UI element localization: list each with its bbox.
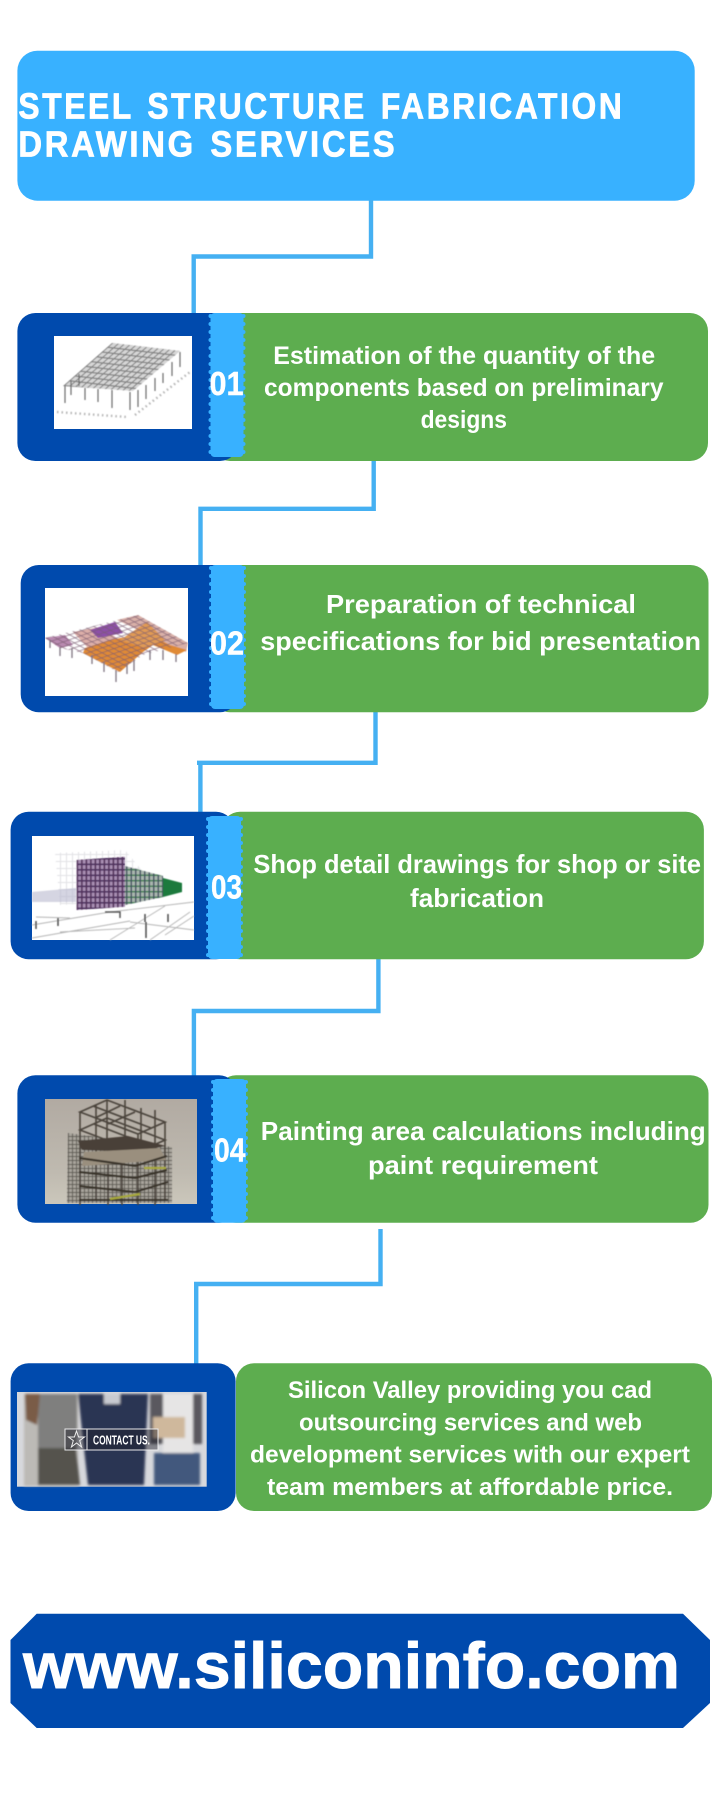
connector arrow: step 3 to step 4 [192,959,378,1076]
step 1 text [264,342,664,434]
connector arrow: step 4 to contact card [194,1229,380,1364]
image: steel building photo [45,1099,197,1205]
step 2 text: Preparation of technical [326,589,636,619]
connector arrow: step 1 to step 2 [198,457,374,565]
title text: DRAWING SERVICES [18,124,397,165]
step 4 text: paint requirement [368,1150,598,1180]
step 3 number strip [208,816,242,959]
contact card text: team members at affordable price. [267,1474,673,1501]
image: multi-storey wireframe [32,836,194,940]
step 4 text: Painting area calculations including [261,1116,706,1146]
step 1 number strip: 01 [210,365,244,402]
step 1 number strip [210,313,244,457]
contact card text: Silicon Valley providing you cad [288,1377,652,1404]
step 3 text: Shop detail drawings for shop or site [253,849,701,879]
title banner [17,51,695,201]
website address: www.siliconinfo.com [22,1629,680,1702]
step 3 text [253,849,701,913]
connector arrow: title to step 1 [192,200,371,313]
contact us sign: CONTACT US. [93,1432,150,1448]
step 1 text: designs [421,406,507,434]
image: team with contact us sign [17,1392,207,1487]
panel: step 3 [11,812,704,959]
panel: contact card [11,1363,712,1511]
step 2 text [260,589,701,656]
image: steel frame model [54,336,192,429]
step 4 number strip: 04 [214,1132,246,1169]
panel: step 2 [21,565,708,712]
step 2 number strip: 02 [210,624,244,661]
connector arrow: step 2 to step 3 [197,708,376,812]
panel: step 4 [17,1075,708,1223]
step 4 text [261,1116,706,1180]
title text: STEEL STRUCTURE FABRICATION [18,85,624,126]
footer website banner [10,1614,710,1728]
step 4 number strip [213,1079,246,1223]
image: coloured structural model [45,588,188,696]
step 1 text: components based on preliminary [264,374,664,402]
contact us sign [65,1429,158,1450]
step 1 text: Estimation of the quantity of the [273,342,655,370]
step 3 text: fabrication [410,883,544,913]
contact card text: development services with our expert [250,1442,690,1469]
step 3 number strip: 03 [211,868,242,905]
title text [18,85,624,165]
contact card text [250,1377,690,1501]
contact card text: outsourcing services and web [299,1410,642,1437]
step 2 text: specifications for bid presentation [260,626,701,656]
panel: step 1 [17,313,708,461]
step 2 number strip [210,565,244,709]
